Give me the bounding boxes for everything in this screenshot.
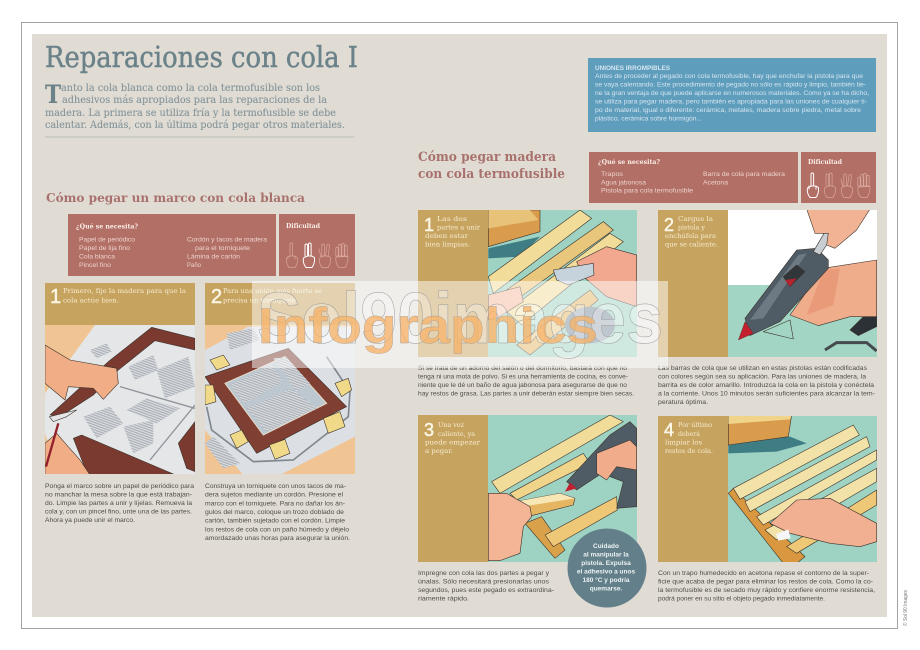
panel: materiales termofusible: Trapos [601,171,624,178]
panel: materiales termofusible: Pistola para cola termofusible [601,188,693,195]
callout: uniones irrompibles: se vaya calentando. Este procedimiento de pegado no sólo es rápido y limpio, también tie- [595,82,866,88]
step 2 text: cola blanca [205,483,350,542]
panel: materiales termofusible: Acetona [703,180,728,186]
warning circle: 180 °C y podría [582,576,630,584]
heading: termofusible [418,150,565,182]
step 3 header: termofusible: caliente, ya [438,430,475,438]
step 1 header: termofusible: 1 [424,215,434,235]
panel: materiales termofusible: Agua jabonosa [601,180,646,186]
warning circle: Cuidado [593,543,619,550]
title: Reparaciones con cola I [45,40,358,74]
icon: hand two fingers [824,173,836,198]
panel: materiales cola blanca: Cola blanca [79,254,115,261]
intro text: anto la cola blanca como la cola termofusible son los [61,83,320,94]
heading: cola blanca: Cómo pegar un marco con cola blanca [46,191,305,205]
step 1 text: cola blanca: Ponga el marco sobre un papel de periódico para [45,483,194,490]
step 2 text: termofusible: barrita es de color amarillo. Introduzca la cola en la pistola y conéctela [658,382,874,389]
step 4 header: termofusible: limpiar los [665,438,703,446]
icon: hand four fingers [858,173,870,198]
warning circle: pistola. Expulsa [581,560,631,567]
step 1 text: cola blanca: do. Limpie las partes a unir y líjelas. Remueva la [45,500,192,507]
step 2 text: termofusible: con colores según sea su aplicación. Para las uniones de madera, la [658,374,866,380]
step 1 text: termofusible: niente que le dé un baño de agua jabonosa para asegurarse de que no [418,382,627,389]
step 2 header: termofusible: pistola y [678,224,705,232]
panel: materiales cola blanca: Lámina de cartón [187,254,240,261]
warning circle: el adhesivo a unos [577,568,635,576]
icon: hand one finger active [807,173,819,198]
step 2 header: cola blanca: 2 [211,286,222,308]
step 1 text: termofusible: tenga ni una mota de polvo. Si es una herramienta de cocina, es conve- [418,374,628,380]
step 3 text: termofusible: segundos, pues este pegado es extraordina- [418,587,554,594]
step 2 header: termofusible [658,210,728,357]
callout: uniones irrompibles: Antes de proceder al pegado con cola termofusible, hay que enchufar la pistola para que [595,73,863,80]
panel: dificultad cola blanca [279,214,355,276]
step 2 header: termofusible: que se caliente. [665,241,718,249]
step 2 header: cola blanca: Para una unión más fuerte se [223,287,322,295]
step 2 text: termofusible: peratura óptima. [658,399,708,406]
icon: hand one finger [286,243,298,268]
intro text: madera. La primera se utiliza fría y la termofusible se debe [45,108,336,119]
panel: materiales termofusible: ¿Qué se necesita? [598,158,660,166]
callout: uniones irrompibles: plástico, cerámica sobre hormigón... [595,116,702,122]
panel: materiales cola blanca: para el torniquete [195,245,250,252]
panel: materiales cola blanca: Papel de lija fino [79,245,130,252]
warning circle: quemarse. [590,586,622,592]
step 4 text: termofusible [658,570,875,602]
callout: uniones irrompibles: se utiliza para pegar madera, pero también es apropiada para las uniones de cualquier ti- [595,98,867,106]
step 4 header: termofusible: 4 [664,420,674,440]
warning circle [568,528,646,608]
step 2 text: cola blanca: los restos de cola con un paño húmedo y déjelo [205,526,349,533]
step 1 header: cola blanca [45,283,195,325]
intro text: calentar. Además, con la última podrá pegar otros materiales. [45,120,345,131]
step 2 text: termofusible: a la corriente. Unos 10 minutos serán suficientes para alcanzar la tem- [658,390,875,398]
step 3 header: termofusible: puede empezar [425,438,481,446]
step 1 header: cola blanca: Primero, fije la madera para que la [63,287,186,295]
callout: uniones irrompibles: UNIONES IRROMPIBLES [595,65,670,72]
step 2 text: termofusible [658,365,875,406]
step 3 text: termofusible [418,570,554,602]
step 2 header: termofusible: enchúfela para [665,232,716,240]
step 3 text: termofusible: riamente rápido. [418,596,469,602]
illustration: sticks and rag [488,210,637,357]
step 3 text: termofusible: Impregne con cola las dos partes a pegar y [418,570,550,577]
step 4 text: termofusible: podrá poner en su sitio el objeto pegado inmediatamente. [658,596,825,602]
callout: uniones irrompibles: po de material, igual o diferente: cerámica, metales, madera sobre piedra, metal sobre [595,107,861,114]
step 1 header: cola blanca: 1 [50,286,61,308]
step 4 text: termofusible: la termofusible es de secado muy rápido y confiere enorme resistencia, [658,587,875,594]
step 2 text: termofusible: Las barras de cola que se utilizan en estas pistolas están codificadas [658,365,868,372]
panel: materiales termofusible [589,152,798,203]
panel: materiales termofusible: Barra de cola para madera [703,171,785,178]
step 2 text: cola blanca: Construya un torniquete con unos tacos de ma- [205,483,346,490]
step 4 header: termofusible: Por último [678,421,712,429]
step 3 header: termofusible: Una vez [438,421,465,429]
icon: hand three fingers [841,174,853,198]
illustration: glue gun [728,209,877,357]
panel: materiales cola blanca: Pincel fino [79,262,111,269]
icon: hand two fingers active [303,243,315,268]
panel: materiales cola blanca: Papel de periódico [79,237,135,244]
step 2 text: cola blanca: amordazado unas horas para asegurar la unión. [205,535,350,542]
intro text [45,80,345,131]
step 1 text: cola blanca: Ahora ya puede unir el marco. [45,517,135,524]
step 2 text: cola blanca: marco con el torniquete. Para no dañar los án- [205,500,345,507]
step 3 header: termofusible: 3 [424,420,434,440]
step 1 text: cola blanca: no manchar la mesa sobre la que está trabajan- [45,492,192,498]
panel: materiales cola blanca: ¿Qué se necesita? [76,222,138,230]
step 1 header: termofusible [418,210,488,357]
step 3 header: termofusible [418,415,488,562]
illustration: cleaning glue [728,415,877,563]
callout: uniones irrompibles [588,58,876,132]
step 1 header: termofusible: Las dos [437,215,468,223]
icon: hand three fingers [319,244,331,268]
step 1 text: cola blanca: cola y, con un pincel fino, unte una de las partes. [45,508,192,516]
heading: termofusible: Cómo pegar madera [418,150,557,165]
callout: uniones irrompibles: ne la gran ventaja de que puede aplicarse en numerosos materiales. Como ya se ha dicho, [595,90,869,97]
step 4 header: termofusible: deberá [678,430,700,438]
step 2 header: termofusible: 2 [664,215,674,235]
heading: termofusible: con cola termofusible [418,167,565,182]
step 4 text: termofusible: ficie que acaba de pegar para eliminar los restos de cola. Como la co- [658,578,873,586]
step 1 text: termofusible: hay restos de grasa. Las partes a unir deberán estar siempre bien secas. [418,390,634,398]
panel: materiales cola blanca: Cordón y tacos de madera [187,237,267,244]
step 1 header: cola blanca: cola actúe bien. [63,297,119,305]
panel: dificultad cola blanca: Dificultad [286,222,320,230]
step 3 text: termofusible: únalas. Sólo necesitará presionarlas unos [418,578,550,586]
step 2 header: cola blanca: precisa un torniquete. [223,297,298,305]
panel: materiales cola blanca [68,214,276,276]
intro text: adhesivos más apropiados para las reparaciones de la [62,95,327,106]
panel: materiales cola blanca: Paño [187,262,201,269]
step 1 text: termofusible: Si se trata de un adorno del salón o del dormitorio, bastará con que no [418,365,627,372]
step 2 header: termofusible: Cargue la [678,215,713,223]
step 2 header: cola blanca [205,283,355,325]
step 1 header: termofusible: partes a unir [437,224,481,232]
icon: hand four fingers [336,243,348,268]
credit: © Sol 90 Images [902,590,909,626]
illustration: frame in tourniquet [205,325,355,475]
drop cap: T [45,80,61,109]
step 3 header: termofusible: a pegar. [425,447,453,455]
step 1 text: cola blanca [45,483,194,524]
step 4 header: termofusible: restos de cola. [665,447,713,455]
watermark: Infographics [258,298,598,354]
step 4 header: termofusible [658,416,728,562]
step 2 text: cola blanca: gulos del marco, coloque un trozo doblado de [205,509,344,516]
step 1 header: termofusible: deben estar [425,232,469,240]
illustration: gluing picture frame [45,325,195,477]
step 1 text: termofusible [418,365,634,398]
illustration: applying glue [488,415,637,562]
step 2 text: cola blanca: cartón, también sujetado con el cordón. Limpie [205,518,345,525]
warning circle: al manipular la [583,552,629,558]
step 4 text: termofusible: Con un trapo humedecido en acetona repase el contorno de la super- [658,570,869,577]
panel: dificultad termofusible [801,152,876,203]
step 1 header: termofusible: bien limpias. [425,241,470,249]
panel: dificultad termofusible: Dificultad [808,158,842,166]
step 2 text: cola blanca: dera sujetos mediante un cordón. Presione el [205,492,343,499]
watermark: Sol90images [257,279,663,359]
